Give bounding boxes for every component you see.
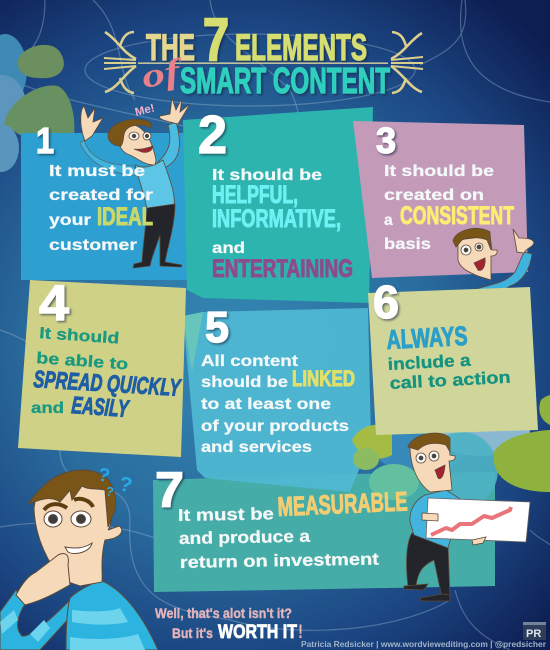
panel 5: [183, 308, 371, 492]
title: of: [139, 52, 188, 96]
text: panel 6: call to action: [389, 368, 511, 393]
text: panel 5: All content: [201, 353, 298, 370]
text: panel 2: It should be: [212, 167, 322, 184]
text: panel 3: [384, 163, 514, 253]
number 2: 2: [198, 105, 227, 165]
closing remark: But it's: [172, 625, 213, 641]
text: panel 3: It should be: [384, 163, 494, 180]
text: panel 2: ENTERTAINING: [212, 255, 353, 283]
title: SMART CONTENT: [180, 60, 390, 101]
title: [138, 6, 390, 101]
panel 2: [183, 107, 373, 303]
number 4: 4: [39, 275, 69, 331]
character: big thinking man: [0, 470, 158, 650]
text: panel 6: include a: [387, 351, 472, 374]
text: panel 6: ALWAYS: [386, 321, 468, 355]
text: panel 2: INFORMATIVE,: [212, 205, 341, 233]
title: ELEMENTS: [235, 27, 367, 68]
question marks: ?: [96, 464, 112, 487]
closing remark: [155, 605, 303, 643]
text: panel 4: SPREAD QUICKLY: [33, 366, 182, 402]
number 3: 3: [376, 120, 396, 161]
text: panel 2: HELPFUL,: [212, 181, 298, 209]
character: man pointing up: [453, 228, 534, 292]
left flourish: [104, 32, 136, 93]
text: panel 7: and produce a: [179, 527, 311, 548]
text: panel 7: It must be: [178, 504, 274, 525]
closing remark: WORTH IT: [218, 622, 297, 643]
text: panel 7: return on investment: [180, 550, 379, 572]
text: panel 2: [212, 167, 353, 283]
number 1: 1: [36, 120, 54, 161]
text: panel 3: a: [384, 212, 393, 229]
question marks: [96, 464, 134, 500]
text: panel 1: created for: [49, 187, 153, 204]
panel 3: [353, 121, 528, 278]
text: panel 6: [386, 321, 511, 393]
text: panel 3: created on: [384, 187, 484, 204]
text: panel 5: LINKED: [292, 366, 355, 391]
text: panel 4: be able to: [36, 350, 129, 373]
text: panel 2: and: [212, 240, 245, 257]
PR badge: PR: [526, 628, 541, 640]
closing remark: !: [298, 622, 303, 643]
text: panel 5: should be: [201, 374, 288, 391]
text: panel 4: EASILY: [71, 392, 131, 423]
text: panel 5: and services: [201, 439, 312, 456]
text: panel 1: IDEAL: [97, 203, 153, 231]
text: panel 4: It should: [39, 325, 120, 348]
text: panel 1: It must be: [49, 163, 145, 180]
text: panel 5: [201, 353, 355, 456]
title: 7: [203, 6, 229, 73]
text: panel 4: and: [31, 400, 64, 417]
panel 1: [21, 133, 191, 280]
text: panel 5: of your products: [201, 418, 349, 435]
green and blue blobs bottom right: [352, 395, 550, 508]
label: Me!: Me!: [134, 102, 156, 119]
PR badge: [523, 622, 546, 640]
character: man raising hands: [80, 98, 190, 268]
number 5: 5: [205, 303, 229, 352]
question marks: ?: [117, 472, 134, 498]
text: panel 1: [49, 163, 153, 254]
closing remark: Well, that's alot isn't it?: [155, 605, 292, 621]
text: panel 5: to at least one: [201, 396, 331, 413]
chart board: [426, 498, 530, 542]
number 7: 7: [155, 462, 184, 518]
character: man holding chart: [404, 433, 530, 601]
text: panel 3: basis: [384, 236, 431, 253]
panel 6: [368, 287, 538, 435]
green and blue blobs top left: [0, 34, 74, 172]
number 6: 6: [373, 276, 399, 328]
title: THE: [146, 27, 195, 68]
text: panel 4: [31, 325, 182, 423]
text: panel 1: customer: [49, 237, 137, 254]
right flourish: [391, 32, 423, 93]
text: panel 1: your: [49, 212, 91, 229]
panel 7: [153, 472, 495, 592]
credit line: Patricia Redsicker | www.wordviewediting.com | @predsicher: [301, 640, 546, 649]
text: panel 7: [178, 486, 408, 572]
text: panel 7: MEASURABLE: [277, 486, 408, 522]
panel 4: [18, 280, 186, 457]
question marks: ?: [104, 483, 115, 500]
